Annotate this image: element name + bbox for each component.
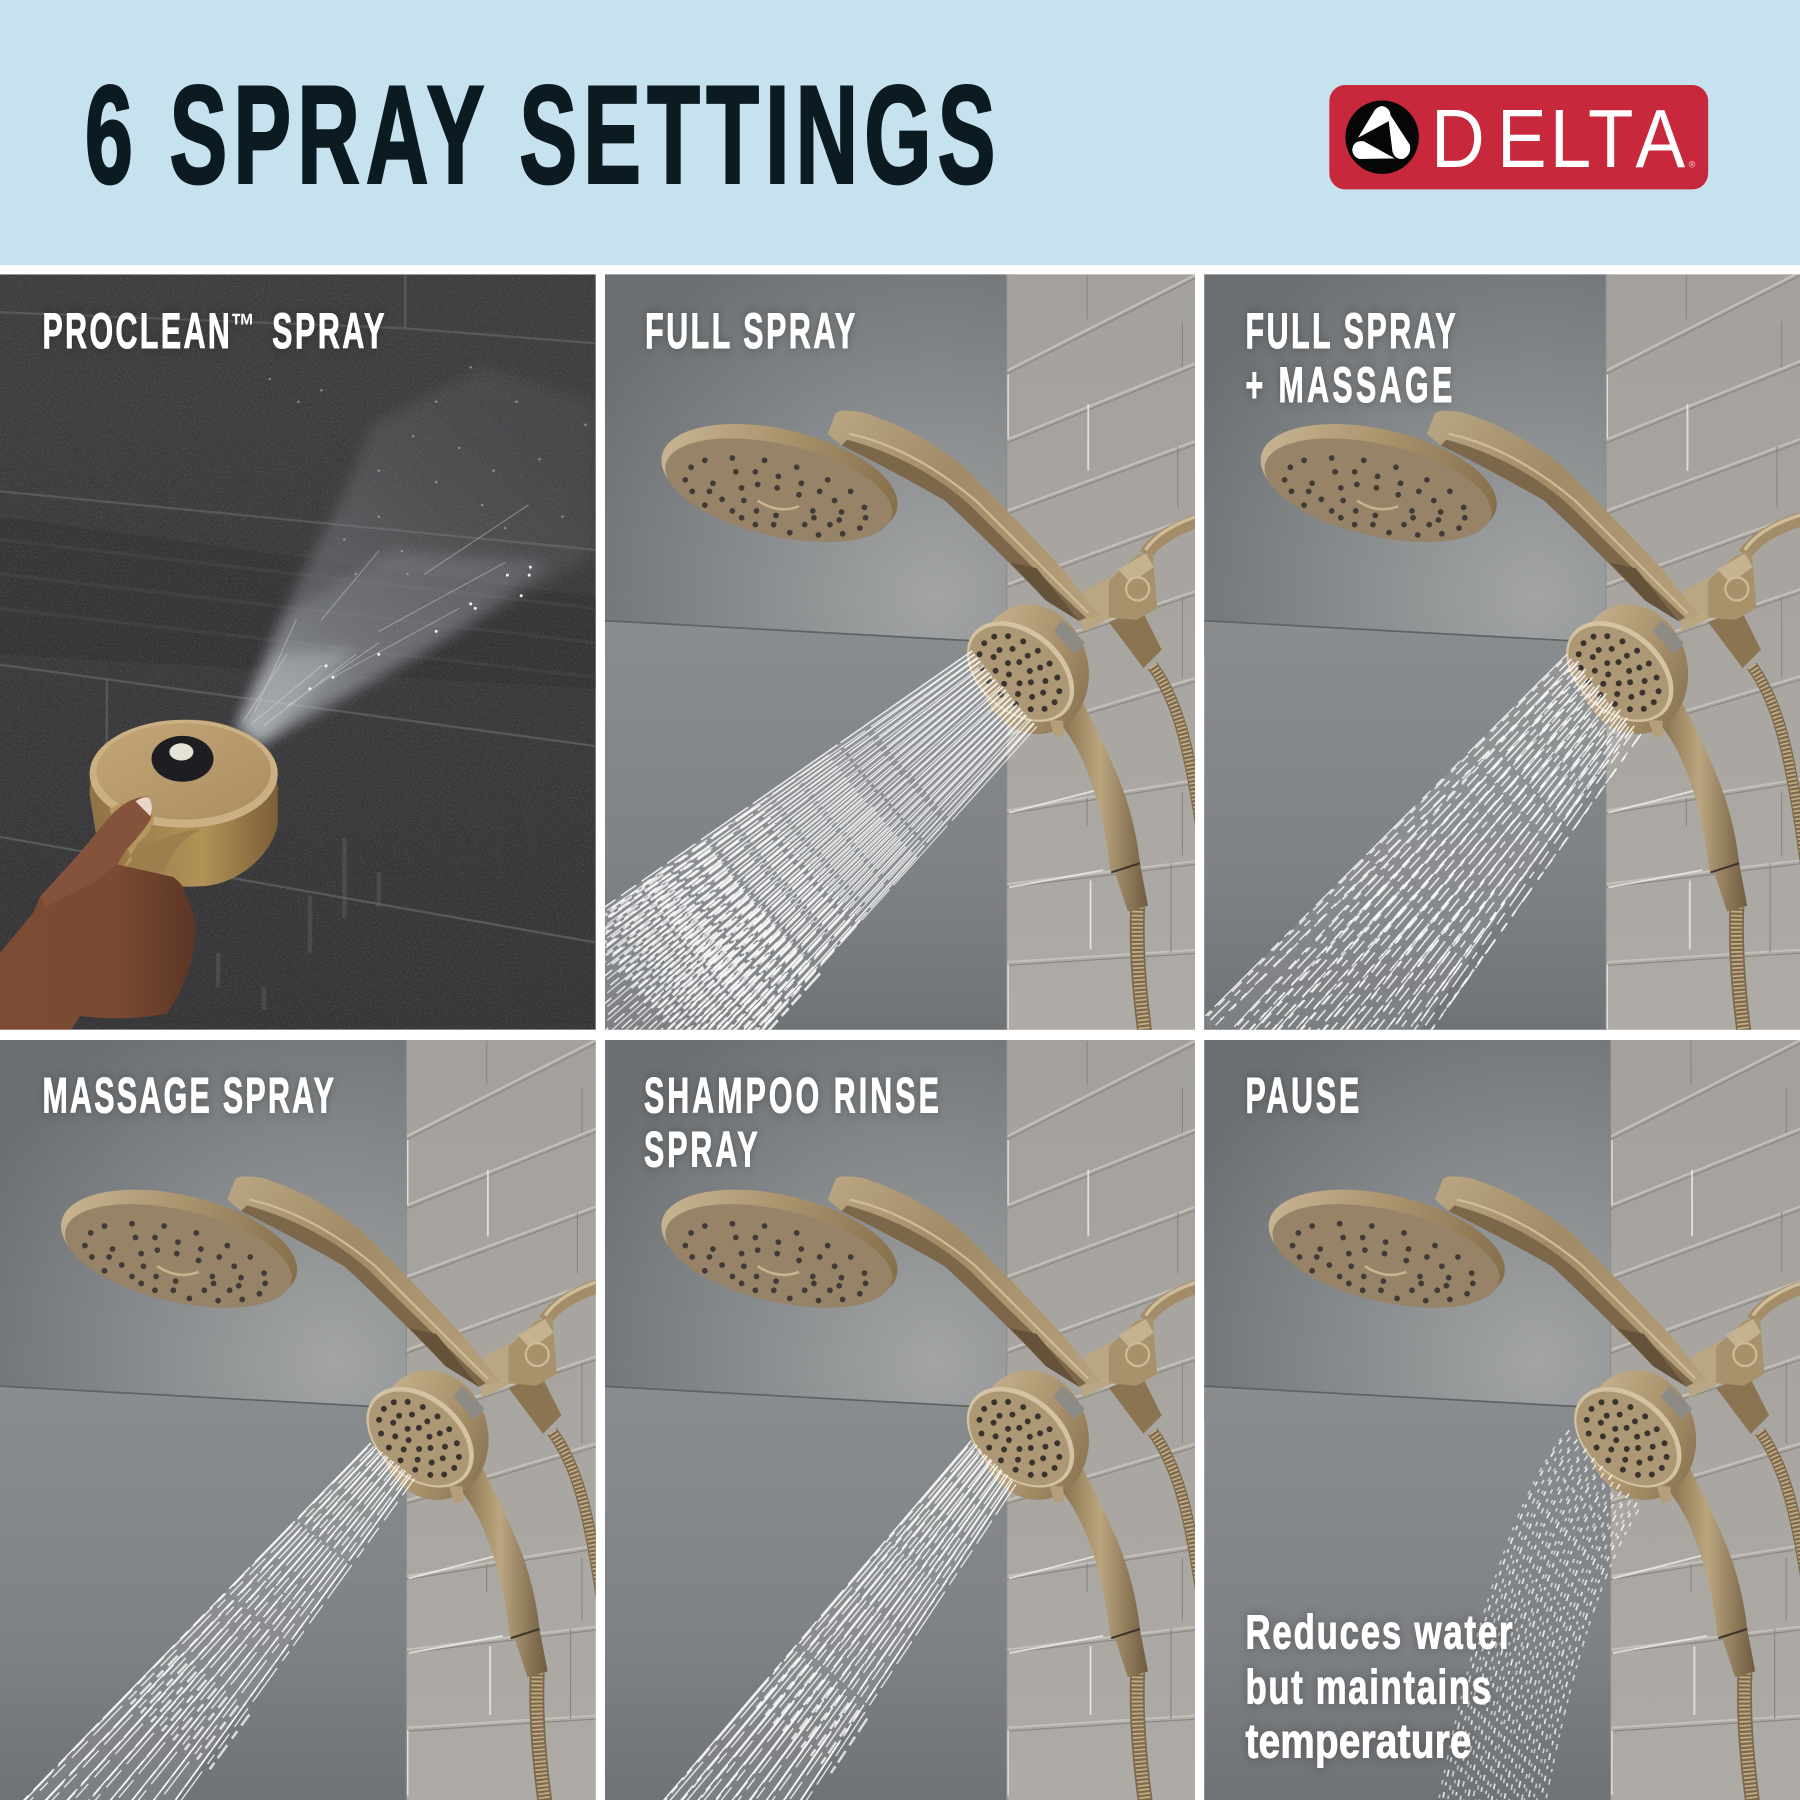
heading: Shampoo rinse spray (644, 1066, 939, 1177)
water streaks (657, 1441, 1019, 1800)
heading: Full spray + massage (1246, 302, 1456, 413)
text block: pause description: Reduces water (1246, 1605, 1513, 1659)
water streaks (597, 651, 1037, 1043)
heading: Full spray + massage: + MASSAGE (1246, 356, 1452, 413)
heading: Shampoo rinse spray: SPRAY (644, 1120, 758, 1177)
button (152, 736, 214, 782)
panel: Shampoo rinse spray (605, 1040, 1195, 1800)
heading: ProClean spray: PROCLEAN (42, 302, 230, 359)
title: 6 SPRAY SETTINGS (85, 58, 995, 213)
water streaks (16, 1443, 418, 1800)
heading: Pause: PAUSE (1246, 1066, 1359, 1123)
water streaks (1201, 654, 1644, 1047)
water mist (238, 367, 596, 744)
text block: pause description: temperature (1246, 1714, 1471, 1769)
heading: Shampoo rinse spray: SHAMPOO RINSE (644, 1066, 939, 1123)
header banner (0, 0, 1800, 265)
heading: ProClean spray: SPRAY (272, 302, 384, 359)
Delta logo (1329, 85, 1708, 189)
heading: ProClean spray (42, 302, 384, 359)
Delta logo: ® (1689, 160, 1696, 170)
heading: ProClean spray: ™ (231, 307, 255, 346)
panel: Full spray (604, 274, 1196, 1030)
panel: Massage spray (0, 1040, 596, 1800)
hand shower disc (90, 720, 278, 887)
Delta logo: DELTA (1431, 92, 1686, 185)
panel: Full spray + massage (1204, 274, 1800, 1030)
water trickle (1428, 1430, 1642, 1800)
hand (0, 797, 195, 1030)
heading: Massage spray: MASSAGE SPRAY (42, 1066, 334, 1123)
text block: pause description: but maintains (1246, 1660, 1491, 1714)
panel: Pause (1204, 1040, 1800, 1800)
panel: ProClean spray (0, 274, 596, 1030)
text block: pause description (1246, 1605, 1513, 1769)
heading: Full spray + massage: FULL SPRAY (1246, 302, 1456, 359)
heading: Full spray: FULL SPRAY (645, 302, 855, 359)
